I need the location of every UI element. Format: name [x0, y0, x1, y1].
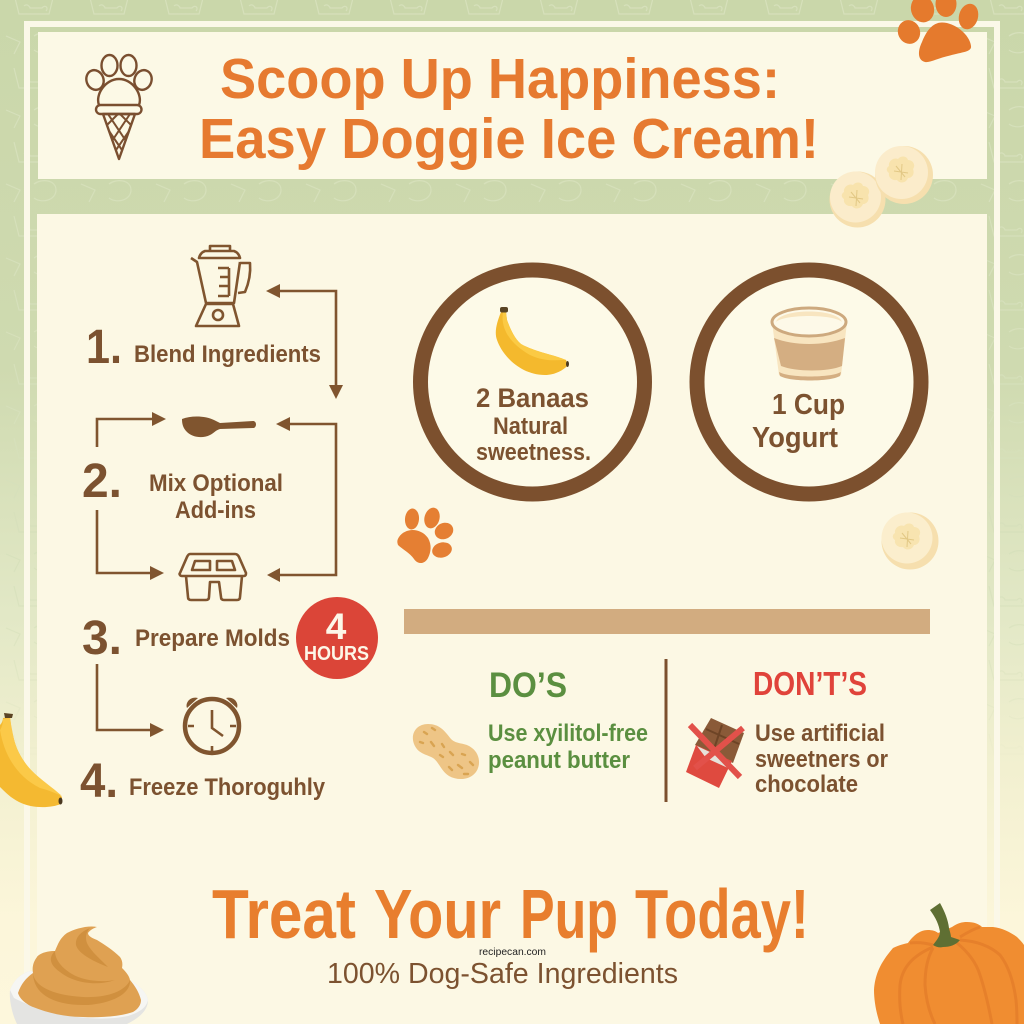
step 1: blender icon [191, 246, 250, 326]
don'ts: DON’T’S [753, 665, 867, 702]
step 1 label: 1. [86, 321, 122, 374]
divider bar [404, 609, 930, 634]
step 3 label [82, 612, 290, 665]
title [199, 47, 819, 171]
icon: crossed chocolate [686, 718, 744, 788]
step 3 label: 3. [82, 612, 122, 665]
ingredient circle: yogurt [697, 270, 921, 494]
don'ts [686, 665, 888, 798]
main panel [37, 214, 987, 1024]
don'ts: Use artificial [755, 720, 885, 747]
icon: pumpkin [874, 903, 1024, 1024]
icon: banana slices top [830, 146, 933, 228]
footer headline: Treat [212, 875, 356, 953]
ingredient circle: yogurt: Yogurt [752, 422, 838, 454]
badge: 4 hours: 4 [326, 606, 347, 647]
step 2 label: Mix Optional [149, 470, 283, 497]
icon: banana [496, 307, 569, 375]
icon: spoon [182, 416, 256, 437]
do's: DO’S [489, 666, 567, 705]
ingredient circle: bananas: Natural [493, 413, 568, 440]
ingredient circle: bananas [420, 270, 644, 494]
badge: 4 hours [296, 597, 378, 679]
icon: yogurt cup [772, 308, 847, 380]
arrow: step 2 bottom [97, 510, 164, 580]
arrow: right return [267, 417, 336, 582]
badge: 4 hours: HOURS [304, 643, 369, 665]
do's: Use xyilitol-free [488, 720, 648, 747]
icon: top paw [894, 0, 981, 62]
arrow: blender loop [266, 284, 343, 399]
step 2 label [82, 455, 283, 524]
step 1 label [86, 321, 321, 374]
header panel [38, 32, 987, 179]
don'ts: chocolate [755, 771, 858, 798]
vertical divider [664, 659, 668, 802]
footer headline: Today! [635, 875, 809, 953]
ingredient circle: yogurt: 1 Cup [772, 389, 845, 421]
footer headline: Your [374, 875, 501, 953]
step 3 label: Prepare Molds [135, 625, 290, 652]
arrow: step 2 top [97, 412, 166, 447]
arrow: step 3 to 4 [97, 664, 164, 737]
ingredient circle: bananas: sweetness. [476, 439, 591, 466]
step 1 label: Blend Ingredients [134, 341, 321, 368]
step 2 label: 2. [82, 455, 122, 508]
step 4 label: Freeze Thoroguhly [129, 774, 326, 801]
do's: peanut butter [488, 747, 630, 774]
icon: left banana [0, 713, 62, 807]
ingredient circle: bananas: 2 Banaas [476, 383, 589, 413]
icon: clock [185, 698, 239, 753]
icon: paw ice cream cone [84, 55, 154, 159]
watermark: recipecan.com [479, 947, 546, 958]
footer subtitle: 100% Dog-Safe Ingredients [327, 958, 678, 990]
icon: banana slice [882, 512, 938, 570]
don'ts: sweetners or [755, 746, 888, 773]
footer headline: Pup [520, 875, 618, 953]
footer headline [212, 875, 809, 953]
do's [413, 666, 648, 779]
step 2 label: Add-ins [175, 497, 256, 524]
icon: peanut [413, 724, 479, 779]
title: Easy Doggie Ice Cream! [199, 107, 819, 171]
title: Scoop Up Happiness: [220, 47, 780, 111]
icon: small paw [397, 506, 456, 563]
step 4 label: 4. [80, 755, 118, 808]
step 4 label [80, 755, 326, 808]
icon: molds [180, 554, 246, 600]
icon: peanut butter bowl [10, 926, 148, 1024]
